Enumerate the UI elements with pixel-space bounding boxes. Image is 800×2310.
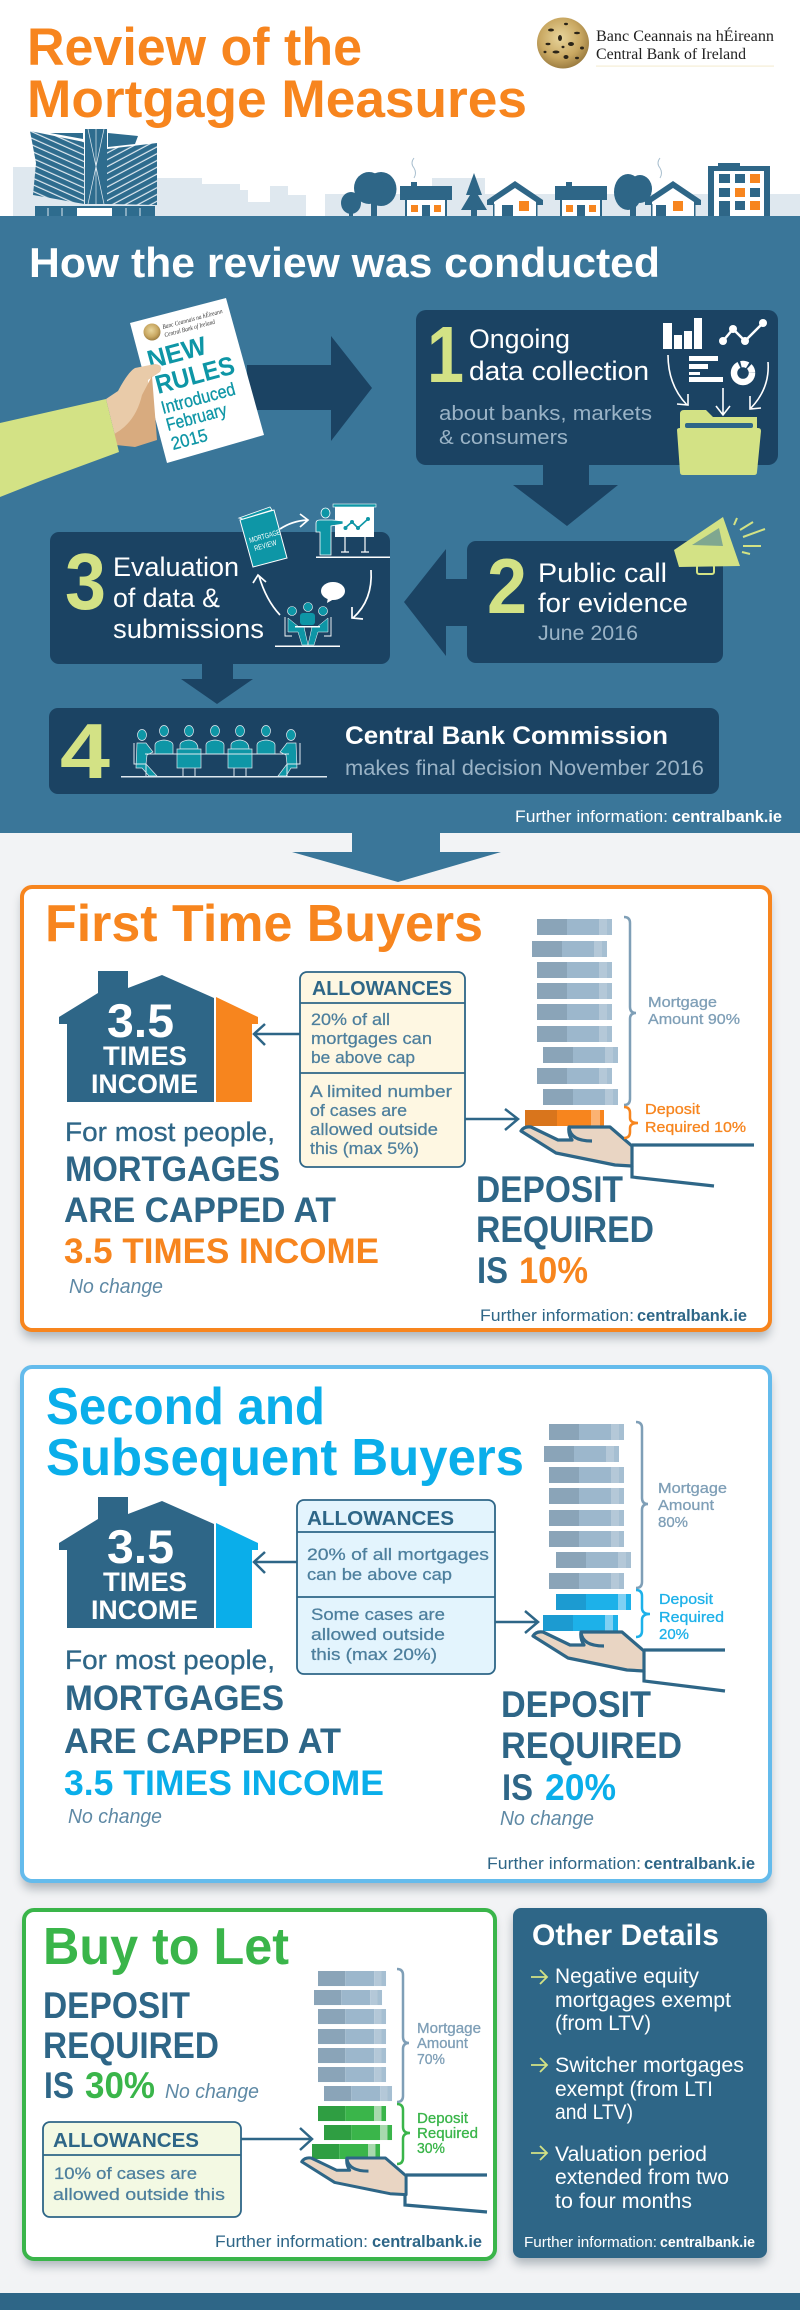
further information: second buyers: centralbank.ie [644, 1855, 755, 1873]
panel: step 1 ongoing data collection: 1 [427, 310, 464, 399]
header background [0, 0, 800, 216]
panel: step 3 evaluation of data and submissions: of data & [113, 583, 220, 613]
text: deposit required 10%: 10% [519, 1250, 588, 1291]
panel: step 3 evaluation of data and submissions: Evaluation [113, 552, 239, 582]
chart: stack of blocks 70/30: Required [417, 2126, 478, 2142]
logo: Central Bank of Ireland [537, 18, 774, 68]
further information: review [515, 808, 782, 826]
panel: step 1 ongoing data collection: data collection [469, 356, 649, 386]
icon: new rules document: NEW [144, 330, 210, 375]
icon: house 3.5 times income: 3.5 [107, 994, 174, 1047]
arrow: rules to step 1 [247, 336, 372, 441]
list: negative equity: Negative equity [555, 1965, 699, 1988]
arrows: allowance pointers [254, 1552, 538, 1633]
text: mortgage cap [64, 1117, 379, 1298]
further information: first time buyers: Further information: [480, 1307, 634, 1325]
text: mortgage cap: No change [69, 1276, 163, 1298]
text: deposit required 10%: REQUIRED [476, 1209, 654, 1250]
further information: first time buyers: centralbank.ie [637, 1307, 747, 1325]
icon: new rules document: February [164, 399, 229, 435]
further information: first time buyers [480, 1307, 747, 1325]
heading: second and subsequent buyers: Subsequent Buyers [46, 1429, 524, 1487]
panel: step 2 public call for evidence [467, 517, 765, 663]
icon: house 3.5 times income [59, 971, 258, 1102]
text: deposit required 30%: No change [165, 2081, 259, 2103]
heading: how the review was conducted: How the review was conducted [29, 239, 660, 286]
arrow: step 2 to step 3 [404, 549, 467, 656]
text: deposit required 10% [476, 1169, 654, 1291]
arrows: review cycle [253, 514, 371, 619]
logo: Central Bank of Ireland: Banc Ceannais na hÉireann [596, 28, 774, 45]
further information: second buyers [487, 1855, 755, 1873]
callout: allowances: be above cap [311, 1048, 415, 1067]
further information: other details [524, 2234, 755, 2251]
further information: review: centralbank.ie [672, 808, 782, 826]
callout: allowances: A limited number [310, 1082, 452, 1101]
panel: how the review was conducted [0, 216, 800, 833]
text: deposit required 20%: DEPOSIT [501, 1684, 651, 1725]
list: switcher mortgages: exempt (from LTI [555, 2078, 713, 2101]
panel: step 2 public call for evidence: Public call [538, 558, 667, 588]
icon: new rules document: Central Bank of Ireland [164, 319, 216, 339]
chart: stack of blocks 70/30: Deposit [417, 2111, 468, 2127]
arrow: step 1 to step 2 [513, 465, 618, 526]
icon: Central Bank building [30, 129, 157, 216]
panel: step 2 public call for evidence: for evidence [538, 588, 688, 618]
title [27, 18, 527, 129]
icon: mortgage review booklet: MORTGAGE [248, 527, 281, 545]
arrow: down to buyer panels [292, 833, 501, 882]
callout: allowances [297, 1500, 495, 1674]
text: mortgage cap: For most people, [65, 1645, 275, 1675]
title: Mortgage Measures [27, 70, 527, 129]
panel: step 4 Central Bank Commission [49, 707, 719, 795]
list: valuation period: extended from two [555, 2166, 729, 2189]
panel: step 3 evaluation of data and submissions: submissions [113, 614, 264, 644]
icon: house 3.5 times income: INCOME [91, 1069, 198, 1099]
panel: second and subsequent buyers [22, 1367, 770, 1889]
footer band [0, 2293, 800, 2310]
icon: house 3.5 times income: 3.5 [107, 1520, 174, 1573]
heading: buy to let: Buy to Let [43, 1918, 289, 1976]
chart: stack of blocks 70/30: 30% [417, 2141, 445, 2157]
list: valuation period: Valuation period [555, 2143, 707, 2166]
callout: allowances: 20% of all [311, 1010, 390, 1029]
icon: new rules document: 2015 [169, 425, 210, 454]
callout: allowances: ALLOWANCES [53, 2130, 199, 2152]
callout: allowances [300, 972, 465, 1167]
panel: step 2 public call for evidence: 2 [487, 542, 527, 630]
panel: step 1 ongoing data collection [416, 310, 778, 475]
chart: stack of blocks 80/20: 20% [659, 1626, 689, 1643]
further information: buy to let: Further information: [215, 2233, 368, 2251]
chart: stack of blocks 90/10: Deposit [645, 1101, 701, 1118]
panel: step 4 Central Bank Commission: Central Bank Commission [345, 722, 668, 750]
text: deposit required 30%: 30% [85, 2065, 155, 2106]
list: switcher mortgages: and LTV) [555, 2101, 633, 2124]
icon: mortgage review booklet: REVIEW [253, 538, 278, 553]
chart: stack of blocks 90/10 [521, 917, 754, 1186]
icon: house 3.5 times income: INCOME [91, 1595, 198, 1625]
chart: stack of blocks 70/30: Mortgage [417, 2021, 481, 2037]
list: negative equity [531, 1965, 731, 2035]
panel: step 1 ongoing data collection: & consumers [439, 427, 568, 449]
callout: allowances: this (max 5%) [310, 1139, 419, 1158]
icon: commission table [121, 726, 327, 778]
text: deposit required 10%: IS [477, 1250, 508, 1291]
list: switcher mortgages: Switcher mortgages [555, 2054, 744, 2077]
callout: allowances: allowed outside this [53, 2185, 225, 2204]
list: switcher mortgages [531, 2054, 744, 2124]
text: deposit required 20% [500, 1684, 682, 1830]
text: deposit required 20%: IS [502, 1767, 533, 1808]
panel: other details [513, 1908, 767, 2264]
callout: allowances: 20% of all mortgages [307, 1545, 489, 1564]
chart: stack of blocks 70/30 [302, 1969, 487, 2212]
panel: buy to let [24, 1910, 495, 2266]
panel: step 1 ongoing data collection: about banks, markets [439, 403, 652, 425]
callout: allowances [43, 2122, 241, 2217]
further information: other details: centralbank.ie [660, 2234, 755, 2251]
text: deposit required 30%: IS [44, 2065, 74, 2106]
icon: hand holding document [0, 364, 161, 497]
text: deposit required 20%: 20% [545, 1767, 616, 1808]
further information: other details: Further information: [524, 2234, 657, 2251]
further information: buy to let [215, 2233, 482, 2251]
text: mortgage cap: 3.5 TIMES INCOME [64, 1764, 384, 1803]
arrows: allowance pointers [254, 1024, 518, 1130]
text: deposit required 30% [43, 1985, 259, 2106]
text: mortgage cap: ARE CAPPED AT [64, 1191, 336, 1230]
further information: review: Further information: [515, 808, 668, 826]
chart: stack of blocks 80/20: Mortgage [658, 1480, 727, 1497]
callout: allowances: 10% of cases are [54, 2164, 197, 2183]
chart: stack of blocks 80/20 [533, 1422, 727, 1691]
text: mortgage cap: ARE CAPPED AT [64, 1722, 341, 1761]
callout: allowances: can be above cap [307, 1565, 452, 1584]
icon: new rules document [130, 298, 264, 463]
icon: meeting group [275, 582, 345, 647]
panel: step 3 evaluation of data and submissions: 3 [65, 537, 106, 626]
icon: megaphone [674, 517, 765, 574]
callout: allowances: Some cases are [311, 1605, 445, 1624]
chart: stack of blocks 80/20: Deposit [659, 1591, 714, 1608]
arrow: allowance pointer [241, 2128, 312, 2150]
panel: step 4 Central Bank Commission: 4 [60, 707, 110, 795]
icon: new rules document: RULES [152, 350, 238, 400]
callout: allowances: ALLOWANCES [312, 978, 452, 1000]
icon: house 3.5 times income: TIMES [103, 1041, 187, 1071]
heading: first time buyers: First Time Buyers [45, 895, 483, 953]
list: negative equity: mortgages exempt [555, 1989, 731, 2012]
callout: allowances: of cases are [310, 1101, 407, 1120]
further information: second buyers: Further information: [487, 1855, 641, 1873]
text: deposit required 10%: DEPOSIT [476, 1169, 623, 1210]
skyline background [13, 167, 800, 216]
list: valuation period: to four months [555, 2190, 692, 2213]
chart: stack of blocks 80/20: Required [659, 1609, 724, 1626]
text: deposit required 20%: REQUIRED [501, 1725, 682, 1766]
chart: stack of blocks 90/10: Required 10% [645, 1119, 746, 1136]
heading: second and subsequent buyers: Second and [46, 1378, 325, 1436]
icon: new rules document: Banc Ceannais na hÉireann [161, 307, 223, 331]
chart: stack of blocks 70/30: 70% [417, 2052, 445, 2068]
callout: allowances: ALLOWANCES [307, 1508, 454, 1530]
text: mortgage cap: 3.5 TIMES INCOME [64, 1232, 379, 1271]
panel: first time buyers [22, 887, 770, 1338]
text: mortgage cap: MORTGAGES [65, 1150, 280, 1189]
text: deposit required 20%: No change [500, 1808, 594, 1830]
chart: stack of blocks 90/10: Amount 90% [648, 1011, 740, 1028]
text: mortgage cap: MORTGAGES [65, 1679, 284, 1718]
list: valuation period [531, 2143, 729, 2213]
panel: step 2 public call for evidence: June 2016 [538, 622, 638, 645]
panel: step 4 Central Bank Commission: makes final decision November 2016 [345, 757, 704, 780]
text: deposit required 30%: DEPOSIT [43, 1985, 190, 2026]
icon: house 3.5 times income [59, 1497, 258, 1628]
chart: stack of blocks 80/20: Amount [658, 1497, 715, 1514]
chart: stack of blocks 90/10: Mortgage [648, 994, 717, 1011]
icon: house 3.5 times income: TIMES [103, 1567, 187, 1597]
callout: allowances: this (max 20%) [311, 1645, 437, 1664]
callout: allowances: mortgages can [311, 1029, 432, 1048]
icon: charts into folder [663, 318, 768, 475]
further information: buy to let: centralbank.ie [372, 2233, 482, 2251]
chart: stack of blocks 70/30: Amount [417, 2036, 468, 2052]
icon: mortgage review booklet [239, 507, 287, 567]
chart: stack of blocks 80/20: 80% [658, 1514, 688, 1531]
text: mortgage cap [64, 1645, 384, 1828]
icon: presenter and flipchart [316, 504, 390, 558]
text: deposit required 30%: REQUIRED [43, 2025, 219, 2066]
text: mortgage cap: No change [68, 1806, 162, 1828]
panel: step 1 ongoing data collection: Ongoing [469, 324, 570, 354]
arrow: step 3 to step 4 [181, 664, 253, 704]
logo: Central Bank of Ireland: Central Bank of Ireland [596, 46, 746, 63]
icon: trees and houses row [341, 158, 770, 216]
heading: other details: Other Details [532, 1919, 719, 1952]
callout: allowances: allowed outside [310, 1120, 438, 1139]
list: negative equity: (from LTV) [555, 2012, 651, 2035]
text: mortgage cap: For most people, [65, 1117, 275, 1147]
icon: new rules document: Introduced [159, 379, 237, 418]
heading: second and subsequent buyers [46, 1378, 524, 1487]
panel: step 3 evaluation of data and submissions [50, 504, 390, 664]
title: Review of the [27, 18, 362, 77]
callout: allowances: allowed outside [311, 1625, 445, 1644]
